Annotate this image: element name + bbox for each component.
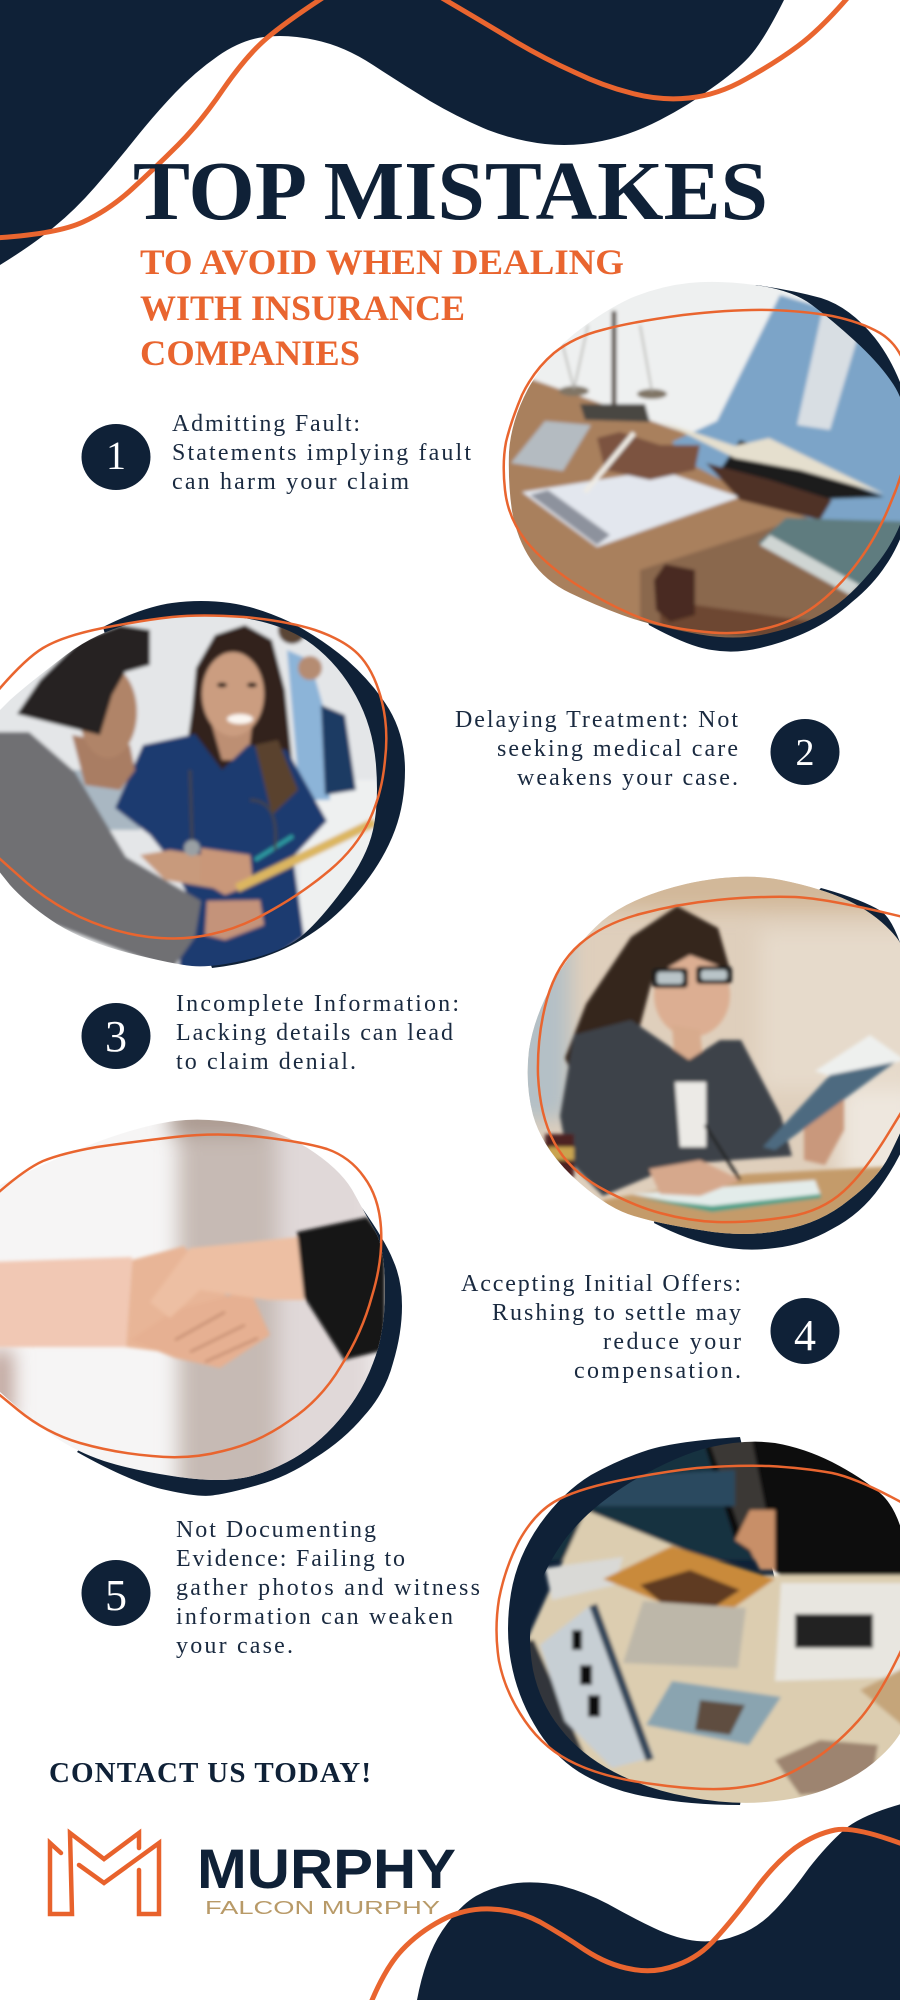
step 4: Accepting Initial Offers: [461,1271,741,1297]
step 1: 1 [106,433,126,478]
step 4: 4 [794,1311,816,1360]
logo [50,1833,456,1918]
step 5: Evidence: Failing to [176,1546,405,1572]
step 3: Incomplete Information: [176,991,459,1017]
bottom navy wave [417,1803,900,2000]
logo: FALCON MURPHY [205,1898,440,1918]
step 4 [461,1271,840,1384]
step 5: information can weaken [176,1604,453,1630]
icon: M logo mark [50,1833,159,1914]
subtitle: WITH INSURANCE [140,288,465,328]
step 1 [82,411,471,495]
step 5 [82,1517,480,1659]
panel: photo 3 lawyer reading [528,876,900,1250]
step 2: Delaying Treatment: Not [455,707,738,733]
panel: photo 5 evidence photos on desk [496,1430,900,1810]
bottom orange line [370,1829,900,2000]
step 4: reduce your [603,1329,741,1355]
step 1: Statements implying fault [172,440,471,466]
step 3 [82,991,459,1075]
panel: photo 1 law desk [490,270,900,660]
step 4: compensation. [574,1358,741,1384]
step 4: Rushing to settle may [492,1300,741,1326]
logo: MURPHY [197,1837,456,1900]
step 5: 5 [105,1571,127,1620]
top navy wave [0,0,784,265]
top orange lines [0,0,850,238]
step 1: Admitting Fault: [172,411,360,437]
subtitle [140,242,624,373]
panel: photo 2 nurse and patient [0,600,405,980]
step 2 [455,707,840,791]
step 5: your case. [176,1633,293,1659]
step 3: Lacking details can lead [176,1020,453,1046]
step 5: gather photos and witness [176,1575,480,1601]
panel: photo 4 handshake [0,1100,402,1500]
step 1: can harm your claim [172,469,409,495]
step 2: 2 [796,732,814,774]
subtitle: COMPANIES [140,333,360,373]
contact heading: CONTACT US TODAY! [49,1757,371,1789]
step 2: seeking medical care [497,736,738,762]
step 3: to claim denial. [176,1049,356,1075]
step 3: 3 [105,1012,127,1061]
step 5: Not Documenting [176,1517,376,1543]
subtitle: TO AVOID WHEN DEALING [140,242,624,282]
step 2: weakens your case. [517,765,738,791]
title: TOP MISTAKES [133,145,768,238]
